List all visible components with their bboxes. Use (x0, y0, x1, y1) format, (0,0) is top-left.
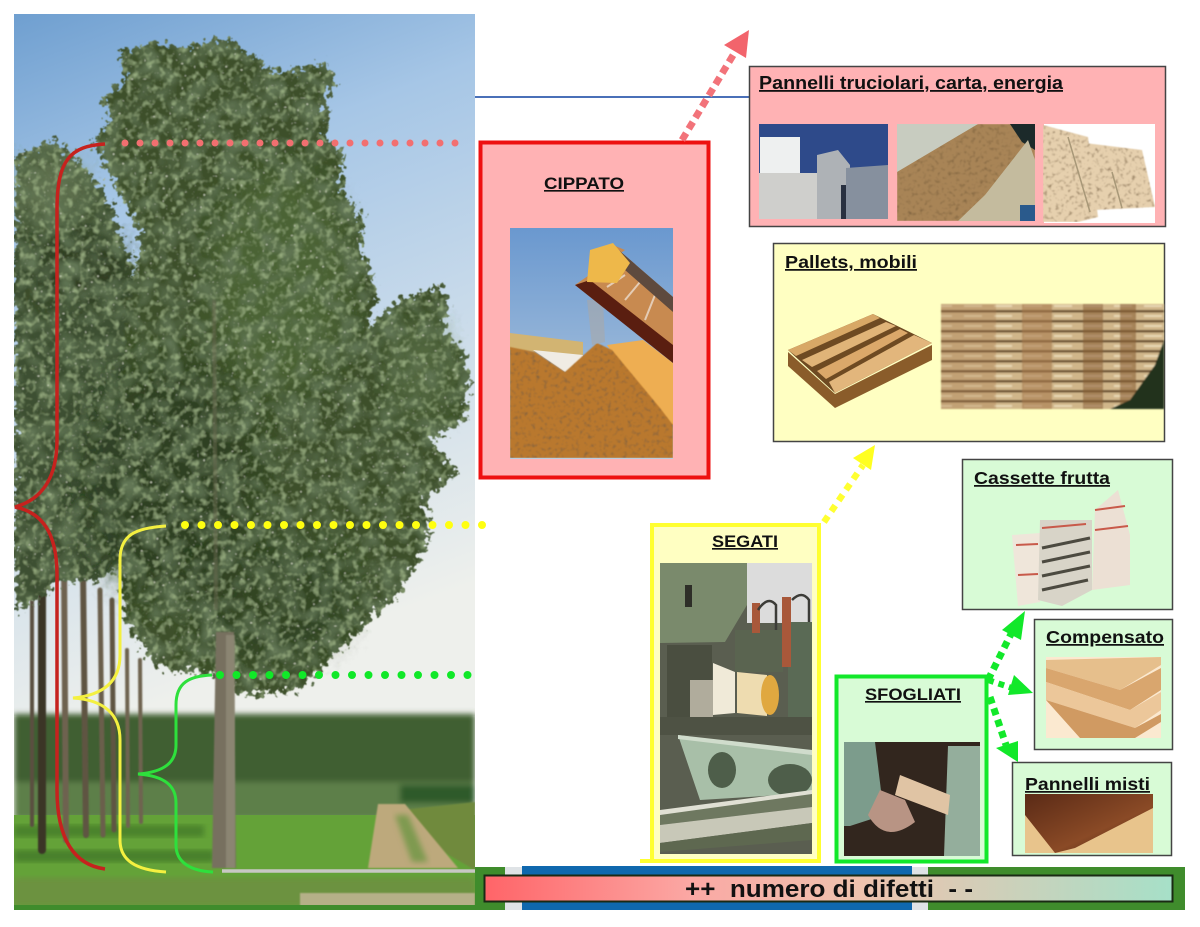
heading: SEGATI (712, 533, 778, 551)
brace: yellow (73, 526, 166, 872)
ground line (222, 869, 520, 873)
arrow: sfogliati to pannelli misti (990, 697, 1018, 762)
panel: cippato (480, 142, 708, 478)
poplar row trunks (32, 560, 141, 850)
panel: segati (640, 525, 819, 861)
green band left (475, 867, 505, 910)
heading: Pannelli misti (1025, 774, 1150, 794)
connector gap right (912, 867, 928, 910)
brace: red (15, 144, 105, 869)
background forest (14, 714, 475, 820)
heading: Pannelli truciolari, carta, energia (759, 73, 1064, 93)
heading: cippato: CIPPATO (544, 175, 624, 193)
heading: Pallets, mobili (785, 252, 917, 272)
gradient bar (484, 876, 1172, 902)
panel: pannelli misti (1012, 762, 1172, 856)
arrow: cippato to panels (682, 30, 749, 140)
photo: plywood (1046, 657, 1161, 738)
poplar row foliage (10, 140, 150, 612)
photo: lumber stack (941, 304, 1164, 409)
arrow: segati to pallets (824, 445, 875, 522)
photo: wood chips (897, 124, 1035, 221)
dotted line: yellow level (185, 521, 484, 529)
icon: pallet (788, 314, 932, 408)
top connector line (475, 96, 749, 98)
defects scale bar (475, 866, 1185, 910)
dotted line: red level (125, 140, 462, 146)
connector gaps (505, 867, 522, 910)
panel: compensato (1034, 620, 1172, 750)
green band right (928, 867, 1185, 910)
arrow: sfogliati to compensato (988, 675, 1033, 695)
main tree crown (80, 38, 470, 695)
photo: fruit crates (1012, 490, 1130, 606)
grass field (14, 802, 475, 907)
dotted line: green level (220, 671, 484, 679)
photo: chipboard sheets (1043, 124, 1155, 223)
photo: wood panel (1025, 794, 1153, 853)
heading: Compensato (1046, 627, 1164, 647)
brace: green (138, 675, 213, 872)
panel: sfogliati (836, 676, 986, 862)
photo: sawmill (660, 563, 812, 854)
heading: SFOGLIATI (865, 686, 961, 704)
heading: Cassette frutta (974, 468, 1110, 488)
blue band (522, 866, 912, 910)
panel: cassette frutta (962, 460, 1172, 610)
main tree trunk (212, 300, 236, 868)
photo: chip conveyor (510, 228, 673, 459)
panel: pannelli truciolari (750, 66, 1166, 226)
arrow: sfogliati to cassette (988, 611, 1025, 680)
scale label: ++ numero di difetti - - (685, 876, 973, 903)
photo: poplar tree in plantation (10, 14, 475, 907)
panel: pallets (774, 244, 1164, 442)
photo: veneer lathe (844, 742, 980, 856)
photo: paper rolls (759, 124, 888, 219)
photo bottom border (14, 905, 504, 910)
